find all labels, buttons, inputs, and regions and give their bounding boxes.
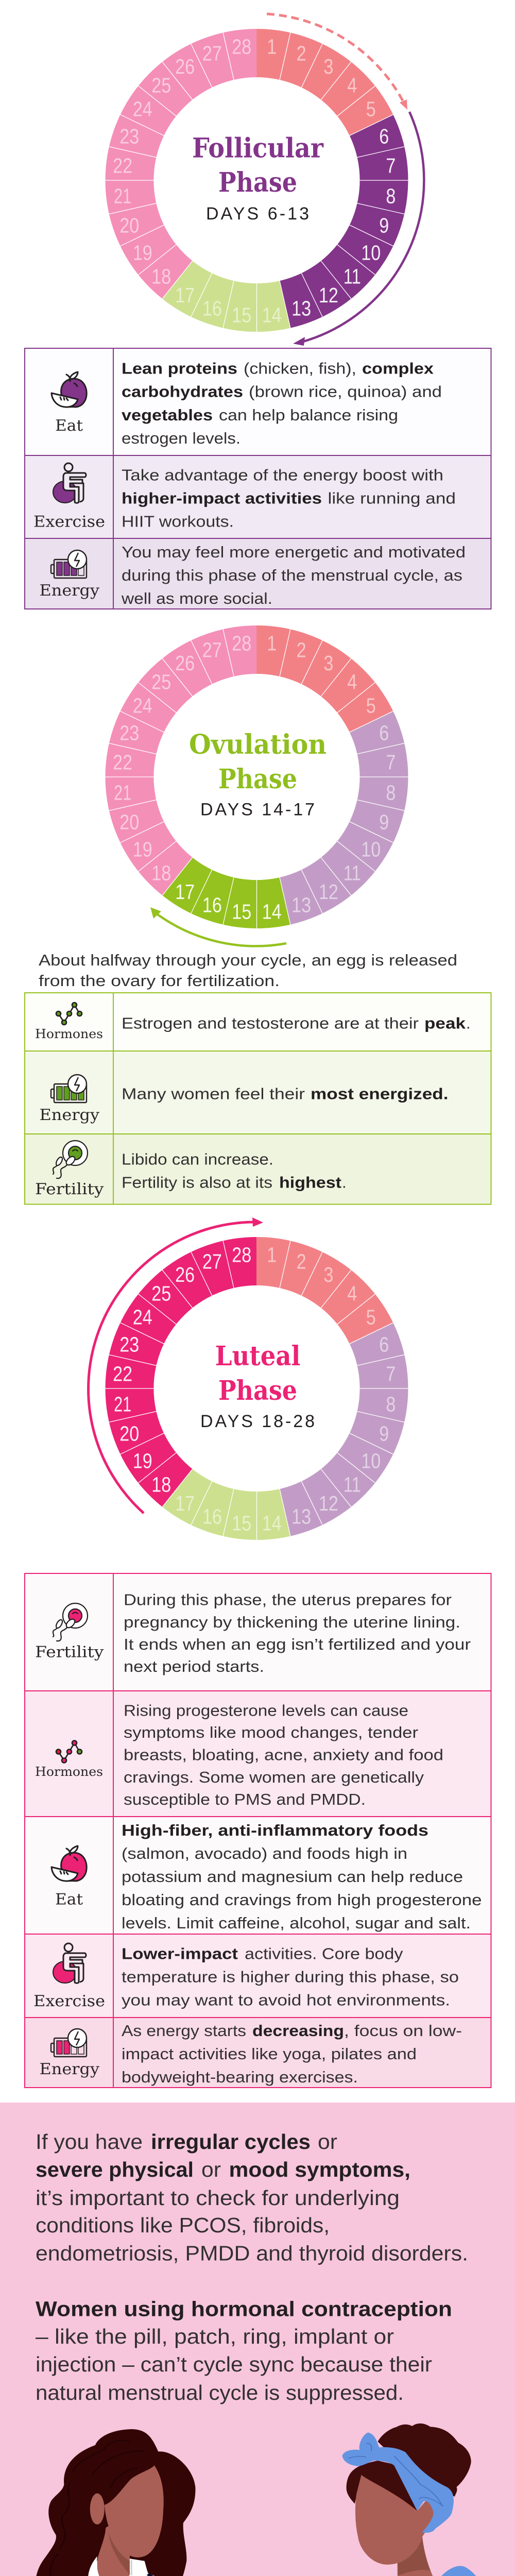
label: Eat: Eat [55,417,83,435]
day numbers: luteal: 19 [133,1449,152,1472]
text: exercise advice: higher-impact activities [122,489,322,507]
text: energy advice: during this phase of the menstrual cycle, as [122,566,462,584]
heading: Luteal Phase: Luteal [215,1341,300,1372]
day numbers: ovulation: 26 [175,651,195,675]
day numbers: luteal [113,1243,396,1535]
text: fertility note: next period starts. [124,1657,264,1675]
day numbers: ovulation: 12 [319,880,338,904]
row: hormones [25,993,491,1051]
icon: battery [51,550,87,578]
icon: egg and sperm [53,1141,88,1178]
day numbers: ovulation: 13 [291,893,311,917]
day numbers: follicular: 18 [151,264,171,288]
wheel: ovulation phase [105,629,408,946]
text: eat advice: complex [362,359,434,377]
day numbers: luteal: 25 [151,1282,171,1306]
heading: Follicular Phase: Follicular [192,133,324,164]
day numbers: ovulation: 8 [386,781,396,804]
text: hormonal contraception: injection – can’t cycle sync because their [36,2352,432,2376]
day numbers: ovulation: 15 [232,900,251,923]
day numbers: follicular: 11 [344,264,361,288]
text: eat advice: levels. Limit caffeine, alcohol, sugar and salt. [122,1914,471,1932]
day numbers: follicular: 22 [113,154,132,178]
text: eat advice [122,359,442,447]
text: eat advice [122,1821,482,1932]
text: energy advice [121,543,466,607]
text: fertility note: Fertility is also at its [122,1173,272,1191]
row: fertility [25,1573,491,1691]
day numbers: follicular: 16 [202,296,222,320]
text: energy advice: You may feel more energetic and motivated [122,543,466,561]
day numbers: follicular: 6 [379,124,389,148]
day numbers: follicular [113,35,396,327]
text: irregular cycles [36,2130,468,2265]
day numbers: luteal: 1 [267,1243,277,1267]
text: energy advice: decreasing [252,2022,344,2040]
day numbers: luteal: 9 [379,1422,389,1446]
figure: doctor [18,2429,362,2576]
icon: exercise ball [53,463,86,503]
text: fertility note: During this phase, the uterus prepares for [124,1591,452,1609]
text: hormones note: Rising progesterone levels can cause [124,1702,408,1720]
text: irregular cycles: conditions like PCOS, fibroids, [36,2213,330,2237]
icon: apple [52,372,87,407]
day numbers: follicular: 21 [114,184,131,208]
label: Energy: Energy [39,582,99,600]
day numbers: luteal: 4 [347,1282,357,1306]
ring segments: ovulation [130,650,384,904]
day numbers: ovulation: 7 [386,751,396,774]
day numbers: luteal: 2 [297,1250,306,1274]
day numbers: luteal: 16 [202,1504,222,1528]
text: exercise advice: HIIT workouts. [122,512,234,531]
row: hormones [25,1691,491,1817]
day numbers: ovulation: 24 [133,694,152,718]
day numbers: follicular: 3 [323,55,333,78]
text: energy advice: As energy starts [122,2022,246,2040]
text: fertility note: It ends when an egg isn’t fertilized and your [124,1635,471,1653]
text: irregular cycles: mood symptoms, [229,2158,410,2181]
text: hormones note: . [466,1014,471,1032]
day numbers: ovulation: 11 [344,861,361,885]
row: exercise [25,1934,491,2018]
wheel: follicular phase [105,14,424,346]
heading: Luteal Phase: Phase [218,1375,297,1406]
days label: 18-28: DAYS 18-28 [200,1412,315,1431]
day numbers: follicular: 28 [232,35,251,59]
text: fertility note [124,1591,471,1675]
arrow: luteal span [89,1217,263,1513]
day numbers: follicular: 13 [291,296,311,320]
day numbers: luteal: 12 [319,1492,338,1515]
heading: Ovulation Phase [189,729,327,795]
day numbers: ovulation: 6 [379,721,389,744]
label: Hormones: Hormones [35,1765,103,1779]
label: Fertility: Fertility [35,1180,104,1198]
day numbers: ovulation: 28 [232,632,251,655]
text: ovulation intro: from the ovary for fertilization. [39,972,280,990]
text: ovulation intro [39,951,457,990]
icon: exercise ball [53,1943,86,1983]
day numbers: luteal: 14 [262,1511,282,1535]
ring segments: follicular [130,53,384,308]
text: energy note [122,1085,448,1103]
text: hormonal contraception: – like the pill, patch, ring, implant or [36,2325,394,2348]
day numbers: luteal: 24 [133,1306,152,1329]
day numbers: follicular: 10 [361,241,381,264]
text: exercise advice: you may want to avoid hot environments. [122,1991,450,2009]
text: hormones note: peak [424,1014,466,1032]
day numbers: luteal: 13 [291,1504,311,1528]
day numbers: luteal: 7 [386,1362,396,1386]
figure: patient [304,2424,514,2576]
days label: 6-13: DAYS 6-13 [206,204,309,224]
day numbers: follicular: 23 [119,124,139,148]
heading: Follicular Phase: Phase [218,167,297,198]
arrow: follicular span [293,112,424,346]
text: hormones note: cravings. Some women are genetically [124,1768,424,1786]
text: eat advice: High-fiber, anti-inflammatory foods [122,1821,428,1839]
text: eat advice: Lean proteins [122,359,237,377]
text: eat advice: vegetables [122,406,213,424]
day numbers: luteal: 3 [323,1263,333,1286]
text: exercise advice [122,1944,459,2009]
text: exercise advice: activities. Core body [245,1944,403,1963]
day numbers: follicular: 1 [267,35,277,59]
label: Exercise: Exercise [33,1992,105,2010]
text: fertility note [122,1150,347,1191]
arrow: dashed menstrual [267,14,407,110]
day numbers: follicular: 20 [119,214,139,238]
heading: Follicular Phase [192,133,324,198]
icon: hormones [56,1740,82,1763]
text: eat advice: potassium and magnesium can help reduce [122,1868,463,1886]
text: hormones note: susceptible to PMS and PMDD. [124,1790,366,1808]
text: energy advice: impact activities like yoga, pilates and [122,2045,417,2063]
text: energy note: most energized. [311,1085,448,1103]
day numbers: follicular: 8 [386,184,396,208]
day numbers: ovulation: 14 [262,900,282,923]
icon: hormones [56,1003,82,1025]
day numbers: ovulation: 16 [202,893,222,917]
day numbers: follicular: 19 [133,241,152,264]
day numbers: luteal: 21 [114,1392,131,1416]
row: exercise [25,455,491,538]
text: energy advice: well as more social. [121,589,272,607]
heading: Ovulation Phase: Phase [218,764,297,795]
day numbers: follicular: 4 [347,74,357,97]
text: eat advice: estrogen levels. [122,429,241,447]
text: hormones note: breasts, bloating, acne, anxiety and food [124,1746,443,1764]
day numbers: luteal: 27 [202,1250,222,1274]
day numbers: follicular: 14 [262,303,282,327]
text: irregular cycles: irregular cycles [151,2130,311,2154]
label: Eat: Eat [55,1891,83,1908]
days label: 14-17: DAYS 14-17 [200,800,315,819]
day numbers: ovulation: 23 [119,721,139,744]
text: hormones note [124,1702,443,1808]
text: exercise advice: Lower-impact [122,1944,238,1963]
row: eat [25,348,491,455]
day numbers: luteal: 20 [119,1422,139,1446]
day numbers: ovulation: 2 [297,638,306,662]
day numbers: ovulation: 3 [323,651,333,675]
day numbers: luteal: 6 [379,1332,389,1356]
day numbers: ovulation: 19 [133,837,152,861]
text: energy advice [122,2022,462,2086]
day numbers: ovulation: 27 [202,638,222,662]
icon: battery [51,1075,87,1103]
text: irregular cycles: it’s important to check for underlying [36,2186,400,2210]
day numbers: follicular: 17 [175,283,195,307]
text: irregular cycles: or [201,2158,221,2181]
illustration: doctor and patient [18,2424,514,2576]
ring segments: luteal [130,1261,384,1516]
day numbers: ovulation: 9 [379,810,389,834]
label: Energy: Energy [39,2060,99,2078]
day numbers: ovulation: 18 [151,861,171,885]
text: irregular cycles: endometriosis, PMDD and thyroid disorders. [36,2241,468,2265]
heading: Ovulation Phase: Ovulation [189,729,327,760]
day numbers: ovulation: 17 [175,880,195,904]
icon: battery [51,2029,87,2057]
day numbers: luteal: 5 [366,1306,376,1329]
day numbers: luteal: 11 [344,1472,361,1496]
day numbers: follicular: 7 [386,154,396,178]
table: ovulation phase [25,993,491,1205]
text: eat advice: (brown rice, quinoa) and [249,383,442,401]
text: energy advice: , focus on low- [344,2022,462,2040]
day numbers: ovulation: 22 [113,751,132,774]
label: Fertility: Fertility [35,1643,104,1662]
day numbers: follicular: 2 [297,42,306,65]
day numbers: ovulation: 21 [114,781,131,804]
day numbers: follicular: 24 [133,97,152,121]
label: Exercise: Exercise [33,513,105,531]
day numbers: follicular: 5 [366,97,376,121]
day numbers: follicular: 26 [175,55,195,78]
text: exercise advice [122,466,456,531]
text: fertility note: Libido can increase. [122,1150,273,1168]
text: fertility note: highest [279,1173,341,1191]
wheel: luteal phase [89,1217,408,1540]
table: luteal phase [25,1573,491,2088]
day numbers: luteal: 26 [175,1263,195,1286]
panel: when to check [0,2103,515,2576]
text: ovulation intro: About halfway through your cycle, an egg is released [39,951,457,969]
text: hormonal contraception [36,2297,452,2404]
arrow: ovulation span [150,907,286,946]
icon: apple [52,1846,87,1881]
day numbers: luteal: 22 [113,1362,132,1386]
text: hormones note: symptoms like mood changes, tender [124,1723,418,1741]
day numbers: ovulation: 5 [366,694,376,718]
text: irregular cycles: If you have [36,2130,143,2154]
day numbers: follicular: 15 [232,303,251,327]
heading: Luteal Phase [215,1341,300,1406]
day numbers: luteal: 17 [175,1492,195,1515]
day numbers: luteal: 28 [232,1243,251,1267]
day numbers: luteal: 18 [151,1472,171,1496]
text: eat advice: bloating and cravings from high progesterone [122,1891,482,1909]
row: energy [25,2018,491,2088]
text: hormonal contraception: natural menstrual cycle is suppressed. [36,2381,404,2404]
text: irregular cycles: severe physical [36,2158,194,2181]
text: exercise advice: temperature is higher during this phase, so [122,1968,459,1986]
table: follicular phase [25,348,491,609]
label: Hormones: Hormones [35,1027,103,1041]
text: eat advice: carbohydrates [122,383,243,401]
label: Energy: Energy [39,1106,99,1124]
text: energy note: Many women feel their [122,1085,305,1103]
text: eat advice: can help balance rising [219,406,398,424]
day numbers: luteal: 23 [119,1332,139,1356]
day numbers: ovulation: 4 [347,670,357,694]
day numbers: ovulation: 10 [361,837,381,861]
day numbers: follicular: 25 [151,74,171,97]
text: exercise advice: like running and [328,489,456,507]
row: energy [25,538,491,609]
text: eat advice: (chicken, fish), [244,359,356,377]
day numbers: luteal: 15 [232,1511,251,1535]
text: fertility note: pregnancy by thickening the uterine lining. [124,1613,460,1631]
icon: egg and sperm [53,1603,88,1641]
text: hormonal contraception: Women using hormonal contraception [36,2297,452,2320]
day numbers: ovulation: 1 [267,632,277,655]
text: exercise advice: Take advantage of the energy boost with [122,466,443,484]
day numbers: ovulation [113,632,396,923]
day numbers: ovulation: 20 [119,810,139,834]
text: hormones note: Estrogen and testosterone are at their [122,1014,419,1032]
row: eat [25,1817,491,1934]
text: energy advice: bodyweight-bearing exercises. [122,2068,358,2086]
day numbers: luteal: 8 [386,1392,396,1416]
text: eat advice: (salmon, avocado) and foods high in [122,1844,407,1862]
day numbers: follicular: 12 [319,283,338,307]
day numbers: follicular: 9 [379,214,389,238]
day numbers: luteal: 10 [361,1449,381,1472]
row: fertility [25,1134,491,1205]
day numbers: ovulation: 25 [151,670,171,694]
text: fertility note: . [342,1173,347,1191]
day numbers: follicular: 27 [202,42,222,65]
text: irregular cycles: or [318,2130,337,2154]
row: energy [25,1051,491,1134]
